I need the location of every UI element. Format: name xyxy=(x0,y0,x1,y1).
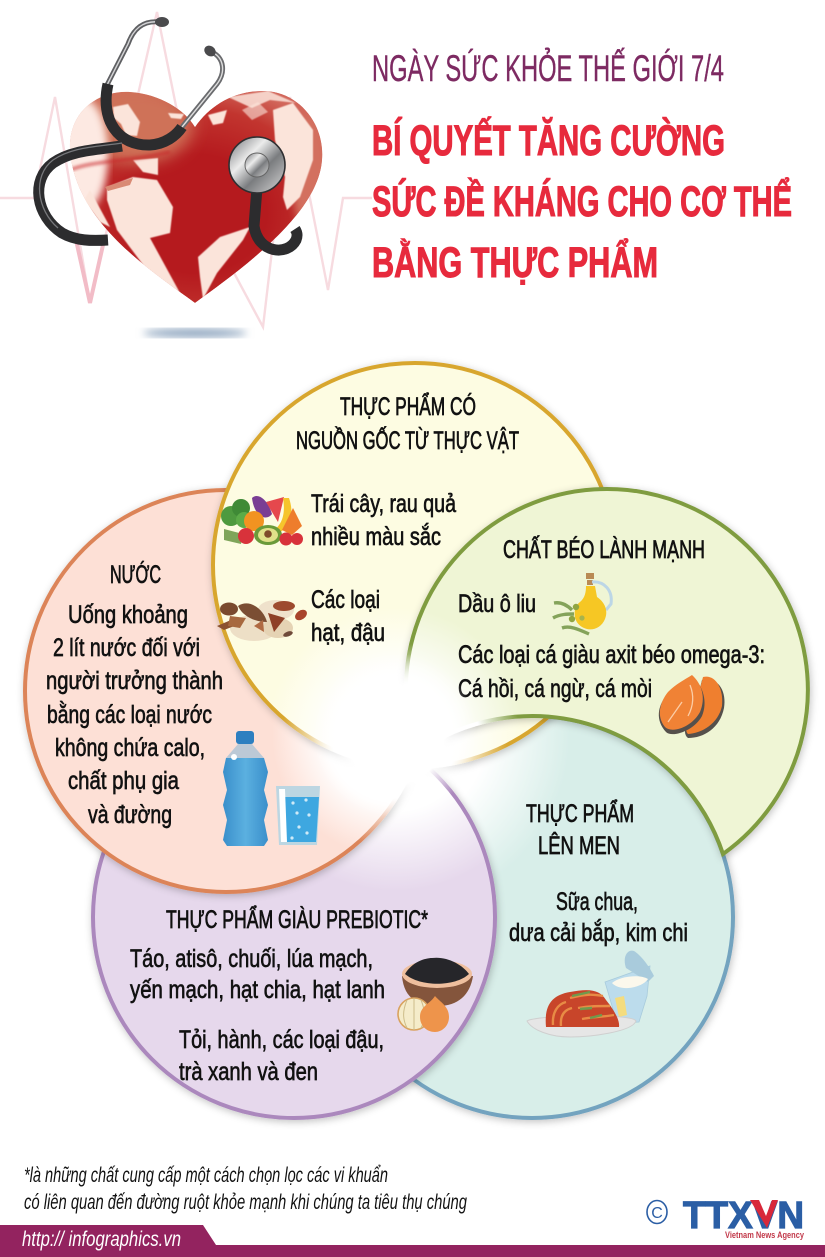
footnote xyxy=(24,1164,467,1214)
icon: water bottle xyxy=(223,731,268,846)
panel: prebiotic foods xyxy=(93,716,495,1118)
text: prebiotic list two xyxy=(179,1026,384,1086)
text: oily fish xyxy=(458,641,765,703)
url text: http:// infographics.vn xyxy=(22,1228,181,1251)
main title xyxy=(372,116,792,287)
text: water advice: không chứa calo, xyxy=(55,734,205,762)
text: water advice xyxy=(46,601,223,829)
footer bar with url xyxy=(0,1225,825,1257)
heart shadow xyxy=(143,328,247,338)
text: fruits and vegetables: nhiều màu sắc xyxy=(311,522,441,551)
title block xyxy=(372,47,792,287)
heading: water: NƯỚC xyxy=(110,560,161,589)
text: fermented list xyxy=(509,888,688,947)
text: water advice: người trưởng thành xyxy=(46,667,223,695)
text: prebiotic list one: yến mạch, hạt chia, hạt lanh xyxy=(130,976,385,1004)
wordmark: TTXVN xyxy=(683,1195,804,1237)
stethoscope ear tubes xyxy=(107,22,223,127)
icon: yogurt cup xyxy=(605,951,654,1023)
center glow xyxy=(313,653,477,817)
text: fruits and vegetables xyxy=(311,490,456,551)
panel: plant foods xyxy=(213,363,617,767)
text: prebiotic list one: Táo, atisô, chuối, lúa mạch, xyxy=(130,945,373,973)
icon: fruits and vegetables xyxy=(221,496,303,546)
icon: salmon steaks xyxy=(659,675,725,738)
continents xyxy=(84,91,313,299)
logo: TTXVN xyxy=(647,1195,804,1240)
panel: water xyxy=(25,490,427,892)
text: water advice: chất phụ gia xyxy=(68,767,179,795)
heading: healthy fats: CHẤT BÉO LÀNH MẠNH xyxy=(503,535,705,564)
heading: prebiotic foods: THỰC PHẨM GIÀU PREBIOTIC* xyxy=(166,905,428,934)
icon: seed bowl and onions xyxy=(398,958,473,1032)
ECG line background xyxy=(0,12,372,327)
heading: fermented foods: LÊN MEN xyxy=(538,831,620,860)
text: oily fish: Cá hồi, cá ngừ, cá mòi xyxy=(458,675,652,703)
heading: fermented foods xyxy=(526,799,634,860)
text: fermented list: dưa cải bắp, kim chi xyxy=(509,918,688,947)
text: fermented list: Sữa chua, xyxy=(556,888,638,916)
text: water advice: và đường xyxy=(88,801,172,829)
stethoscope tube xyxy=(39,84,297,250)
text: nuts and beans: hạt, đậu xyxy=(311,619,385,647)
text: water advice: bằng các loại nước xyxy=(47,700,212,729)
stethoscope chest piece xyxy=(229,137,285,193)
text: prebiotic list two: Tỏi, hành, các loại đậu, xyxy=(179,1026,384,1054)
panel: fermented foods xyxy=(331,716,733,1118)
lobe shading xyxy=(77,87,193,163)
text: prebiotic list two: trà xanh và đen xyxy=(179,1058,318,1086)
copyright mark: C xyxy=(651,1205,663,1222)
illustration: heart globe with stethoscope xyxy=(0,12,372,338)
text: olive oil: Dầu ô liu xyxy=(458,590,536,618)
icon: nuts xyxy=(217,600,309,641)
copyright mark xyxy=(647,1200,667,1224)
footnote: *là những chất cung cấp một cách chọn lọc các vi khuẩn xyxy=(24,1164,388,1187)
heading: plant foods: NGUỒN GỐC TỪ THỰC VẬT xyxy=(296,425,519,455)
text: nuts and beans xyxy=(311,586,385,647)
heart globe xyxy=(60,87,328,303)
heading: plant foods xyxy=(296,392,519,455)
icon: kimchi plate xyxy=(527,990,636,1037)
text: nuts and beans: Các loại xyxy=(311,586,380,614)
stethoscope ear tips xyxy=(155,17,218,59)
heading: plant foods: THỰC PHẨM CÓ xyxy=(340,392,476,421)
text: water advice: Uống khoảng xyxy=(68,601,188,629)
text: water advice: 2 lít nước đối với xyxy=(53,634,200,662)
panel: healthy fats xyxy=(406,489,808,854)
text: prebiotic list one xyxy=(130,945,385,1004)
footnote: có liên quan đến đường ruột khỏe mạnh khi chúng ta tiêu thụ chúng xyxy=(24,1191,467,1214)
icon: olive oil bottle xyxy=(553,573,611,634)
text: fruits and vegetables: Trái cây, rau quả xyxy=(311,490,456,518)
agency caption: Vietnam News Agency xyxy=(725,1230,804,1240)
icon: glass of water xyxy=(276,786,320,845)
main title: BẰNG THỰC PHẨM xyxy=(372,238,658,287)
heading: fermented foods: THỰC PHẨM xyxy=(526,799,634,828)
